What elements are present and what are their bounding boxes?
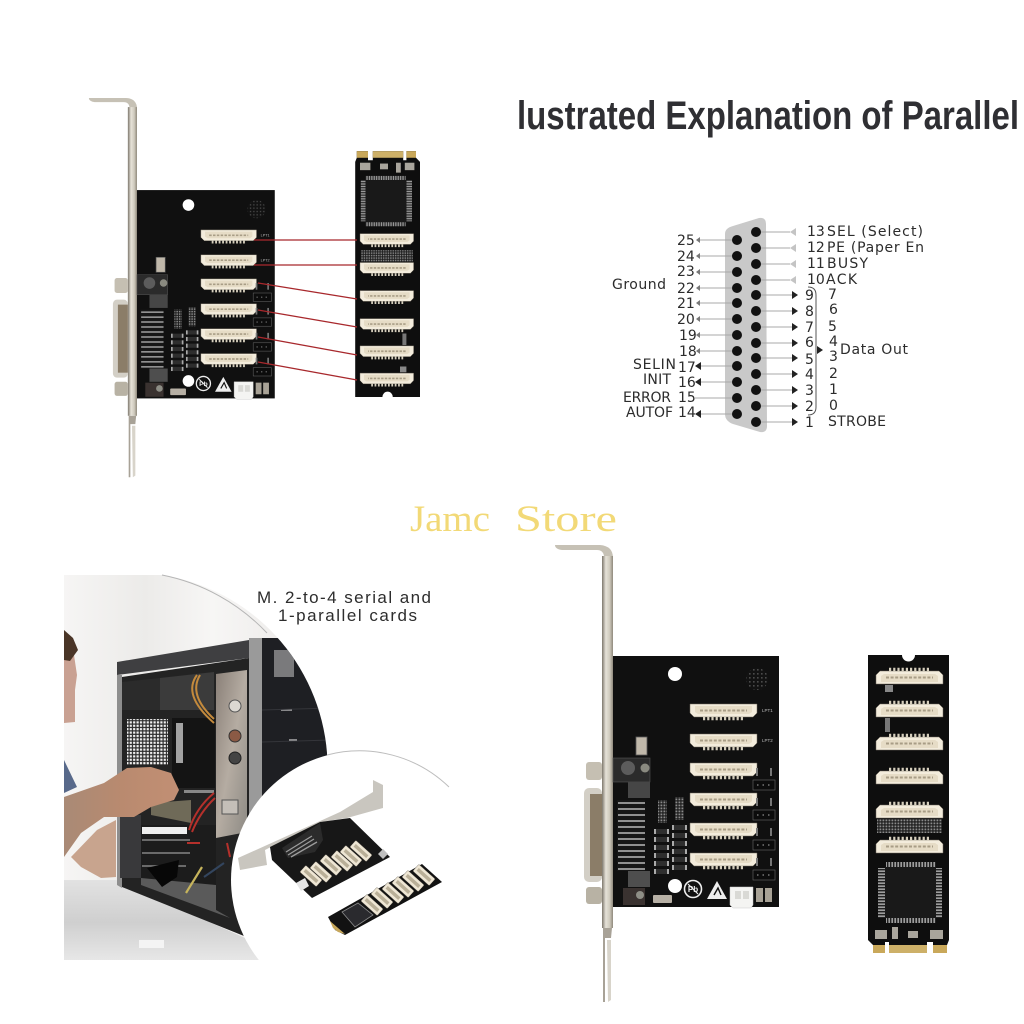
right-side pin numbers and labels: 9 — [805, 288, 814, 304]
data bracket — [808, 287, 816, 415]
isometric bracket — [238, 780, 383, 870]
right-side pin numbers and labels: 0 — [829, 398, 838, 414]
white board slot — [142, 827, 187, 834]
left-side pin numbers and labels: 14 — [678, 405, 696, 421]
pin leader lines — [695, 232, 792, 422]
store watermark: Store — [515, 499, 617, 540]
red cables — [187, 793, 230, 857]
red connection lines — [254, 240, 357, 380]
store watermark — [410, 499, 617, 540]
right-side pin numbers and labels: 10 — [807, 272, 825, 288]
ground arrows — [696, 237, 700, 354]
right-side pin numbers and labels: ACK — [826, 272, 858, 288]
wall background — [64, 575, 278, 938]
connector body — [725, 218, 767, 432]
left-side pin numbers and labels: Ground — [612, 277, 666, 293]
left-side pin numbers and labels: 15 — [678, 390, 696, 406]
M.2 adapter card, rotated — [355, 151, 420, 397]
store watermark: Jamc — [410, 499, 490, 540]
isometric parallel card — [270, 818, 390, 898]
right-side pin numbers and labels: BUSY — [827, 256, 868, 272]
isometric M.2 chip — [342, 903, 373, 927]
left-side pin numbers and labels: 20 — [677, 312, 695, 328]
yellow wires — [186, 867, 202, 893]
left-side pin numbers and labels — [612, 233, 697, 421]
parallel card with bracket — [89, 98, 275, 477]
output arrows — [695, 291, 823, 426]
right-side pin numbers and labels: 7 — [828, 287, 837, 303]
left-side pin numbers and labels: 22 — [677, 281, 695, 297]
isometric card connectors — [300, 840, 372, 887]
table reflection — [139, 940, 164, 948]
pins, right column — [751, 227, 761, 427]
right-side pin numbers and labels: 12 — [807, 240, 825, 256]
isometric M.2 gold edge — [330, 921, 345, 934]
motherboard area — [172, 718, 215, 788]
right-side pin numbers and labels: 11 — [807, 256, 825, 272]
rear arm — [71, 820, 116, 878]
right-side pin numbers and labels: 4 — [805, 367, 814, 383]
head — [64, 650, 77, 723]
photo caption: M. 2-to-4 serial and — [257, 588, 431, 607]
arm and hand — [64, 767, 179, 857]
right-side pin numbers and labels: 7 — [805, 320, 814, 336]
black bag — [147, 860, 179, 887]
mask below the photo — [231, 961, 491, 1011]
left-side pin numbers and labels: 19 — [679, 328, 697, 344]
right-side pin numbers and labels: 4 — [829, 334, 838, 350]
panel: technician installing card photo — [64, 575, 335, 965]
right-side pin numbers and labels: 1 — [805, 415, 814, 431]
left-side pin numbers and labels: 16 — [678, 375, 696, 391]
held card — [151, 800, 191, 823]
left-side pin numbers and labels: 25 — [677, 233, 695, 249]
case floor — [141, 878, 230, 918]
lower left case wall — [120, 815, 141, 878]
input arrows, light — [790, 228, 796, 284]
lower expansion area — [141, 825, 216, 885]
photo caption — [257, 588, 431, 625]
left-side pin numbers and labels: AUTOF — [626, 405, 673, 421]
panel: DB25 parallel port pinout — [612, 218, 924, 432]
case edge strip — [249, 638, 262, 814]
M.2 adapter card — [868, 655, 949, 953]
white circle — [231, 751, 489, 1009]
pins, left column — [732, 235, 742, 419]
drive bay mesh — [127, 719, 168, 765]
right-side pin numbers and labels: 3 — [829, 349, 838, 365]
right-side pin numbers and labels: 2 — [805, 399, 814, 415]
right-side pin numbers and labels: 3 — [805, 383, 814, 399]
right-side pin numbers and labels: 6 — [805, 335, 814, 351]
isometric white connector — [296, 878, 309, 891]
parallel card with bracket — [555, 545, 779, 1002]
circle arc outline — [327, 751, 449, 787]
upper cavity — [122, 678, 160, 710]
orange cables — [192, 675, 214, 723]
left-side pin numbers and labels: 21 — [677, 296, 695, 312]
isometric M.2 connectors — [361, 864, 435, 916]
left-side pin numbers and labels: 17 — [678, 360, 696, 376]
photo circle outline — [162, 575, 267, 633]
left-side pin numbers and labels: INIT — [643, 372, 671, 388]
right-side pin numbers and labels: 5 — [805, 352, 814, 368]
table — [64, 880, 258, 960]
computer case front — [262, 638, 327, 796]
left-side pin numbers and labels: ERROR — [623, 390, 671, 406]
case top bar — [117, 640, 249, 675]
right-side pin numbers and labels: 6 — [829, 302, 838, 318]
photo caption: 1-parallel cards — [278, 606, 417, 625]
panel: parallel card and M.2 card product shot — [555, 545, 949, 1002]
left-side pin numbers and labels: SELIN — [633, 357, 676, 373]
isometric port — [282, 823, 323, 858]
shirt — [64, 760, 77, 793]
left-side pin numbers and labels: 18 — [679, 344, 697, 360]
isometric marking — [378, 849, 388, 859]
right-side pin numbers and labels: 5 — [828, 319, 837, 335]
right-side pin numbers and labels: 8 — [805, 304, 814, 320]
right-side pin numbers and labels: 13 — [807, 224, 825, 240]
hair — [64, 630, 78, 661]
right-side pin numbers and labels: SEL (Select) — [827, 224, 923, 240]
silver rear panel — [216, 670, 247, 838]
isometric M.2 card — [328, 864, 442, 935]
case interior — [122, 658, 249, 938]
right-side pin numbers and labels: 1 — [829, 382, 838, 398]
right-side pin numbers and labels: Data Out — [840, 342, 908, 358]
right-side pin numbers and labels: 2 — [829, 366, 838, 382]
panel: parallel card and M.2 card wiring diagram — [89, 98, 420, 477]
left-side pin numbers and labels: 23 — [677, 264, 695, 280]
left-side pin numbers and labels: 24 — [677, 249, 695, 265]
right-side pin numbers and labels: STROBE — [828, 414, 886, 430]
panel: inset circle with product — [231, 751, 491, 1011]
blue wire — [204, 863, 224, 877]
right-side pin numbers and labels — [805, 224, 924, 431]
right-side pin numbers and labels: PE (Paper En — [827, 240, 924, 256]
